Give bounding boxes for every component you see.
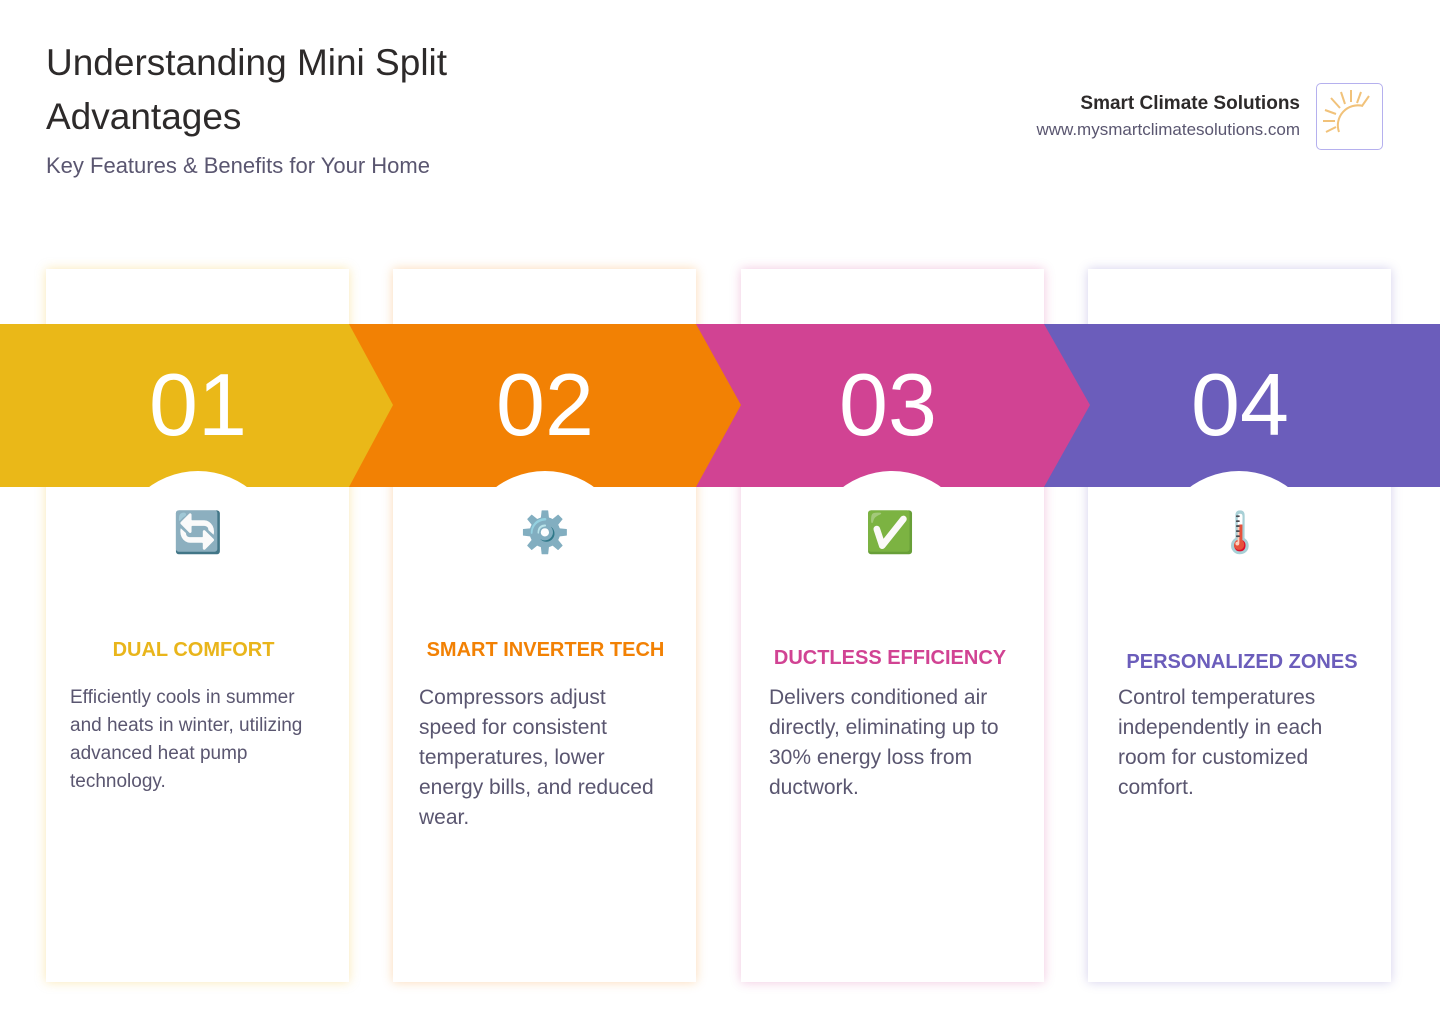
text 3: Delivers conditioned air directly, eliminating up to 30% energy loss from ductwork.: [769, 686, 999, 799]
text 1: Efficiently cools in summer and heats in winter, utilizing advanced heat pump technology.: [70, 687, 302, 792]
icon: thermometer: 🌡️: [1215, 511, 1265, 555]
arrow band: [0, 324, 1440, 487]
icon: check: ✅: [865, 511, 915, 555]
numbers: 01: [149, 355, 247, 454]
heading 1: DUAL COMFORT: [113, 639, 274, 661]
text: 04: [1191, 355, 1289, 454]
subtitle: Key Features & Benefits for Your Home: [46, 153, 430, 178]
heading 3: DUCTLESS EFFICIENCY: [774, 647, 1006, 669]
circles: [115, 471, 281, 637]
icon: logo sun: [1316, 83, 1383, 150]
card 2: [393, 269, 696, 982]
brand text: [1036, 93, 1300, 139]
heading 2: SMART INVERTER TECH: [427, 639, 664, 661]
icon: gear: ⚙️: [520, 511, 570, 555]
title: Understanding Mini Split Advantages: [46, 42, 447, 137]
text: 03: [839, 355, 937, 454]
heading 4: PERSONALIZED ZONES: [1126, 651, 1358, 673]
card 3: [741, 269, 1044, 982]
brand text: www.mysmartclimatesolutions.com: [1036, 120, 1300, 139]
card 1: [46, 269, 349, 982]
text 2: Compressors adjust speed for consistent temperatures, lower energy bills, and reduced wear.: [419, 686, 654, 829]
text: 02: [496, 355, 594, 454]
card 4: [1088, 269, 1391, 982]
brand text: Smart Climate Solutions: [1080, 93, 1300, 114]
icon: refresh: 🔄: [173, 511, 223, 555]
text 4: Control temperatures independently in each room for customized comfort.: [1118, 686, 1322, 799]
